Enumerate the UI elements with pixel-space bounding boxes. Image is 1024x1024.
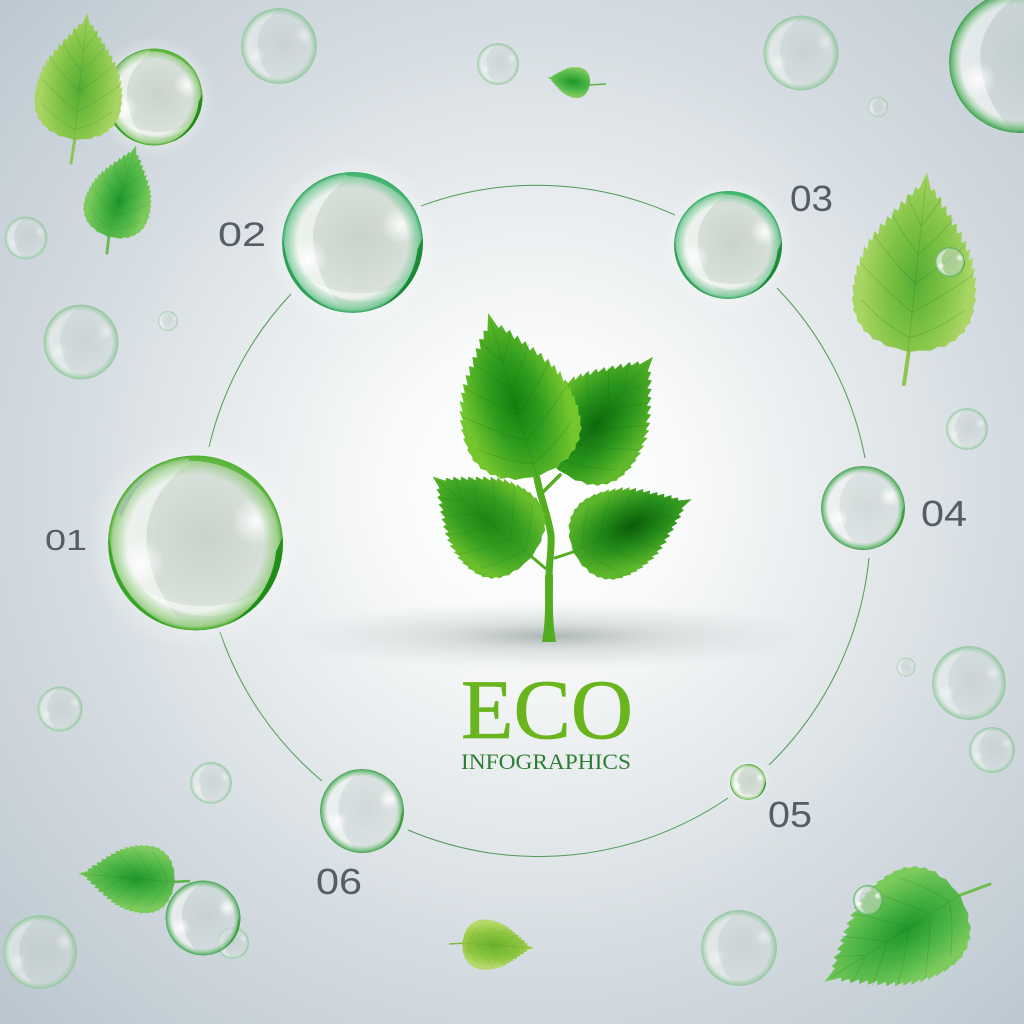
- subtitle INFOGRAPHICS: INFOGRAPHICS: [461, 749, 631, 774]
- plant: back right leaf: [516, 322, 695, 505]
- plant: right leaf: [555, 459, 710, 592]
- bubble 03: [660, 178, 796, 312]
- title ECO: ECO: [461, 663, 633, 757]
- label 06: 06: [316, 861, 362, 902]
- label 01: 01: [45, 525, 87, 557]
- leaf: bottom centre: [449, 918, 536, 973]
- leaf: bottom right: [794, 847, 990, 1024]
- bubble on right leaf: [935, 247, 965, 277]
- bubble 05: [726, 760, 770, 804]
- green bubble top left: [93, 36, 215, 158]
- ring connecting the numbered bubbles: [209, 185, 869, 857]
- plant: top centre leaf: [431, 296, 594, 494]
- plant: stem and branches: [532, 475, 573, 642]
- label 04: 04: [921, 493, 967, 534]
- bubble 02: [264, 154, 441, 331]
- large corner bubble top right: [949, 0, 1024, 133]
- bubble over bottom left leaf: [166, 880, 241, 956]
- leaf: top left light: [30, 8, 131, 163]
- leaf: top left mid green: [76, 135, 168, 253]
- central plant: [402, 296, 710, 642]
- bubble 01: [86, 434, 305, 652]
- label 02: 02: [218, 216, 266, 254]
- bubble 06: [320, 769, 404, 853]
- ground shadow: [279, 602, 819, 670]
- leaf: right large: [846, 165, 989, 384]
- leaf: top centre small: [545, 62, 606, 100]
- bubble 04: [821, 466, 905, 550]
- label 03: 03: [790, 178, 833, 219]
- leaf: bottom left: [75, 839, 190, 916]
- plant: left leaf: [402, 438, 563, 595]
- label 05: 05: [768, 794, 812, 835]
- bubble on bottom right leaf: [853, 885, 883, 915]
